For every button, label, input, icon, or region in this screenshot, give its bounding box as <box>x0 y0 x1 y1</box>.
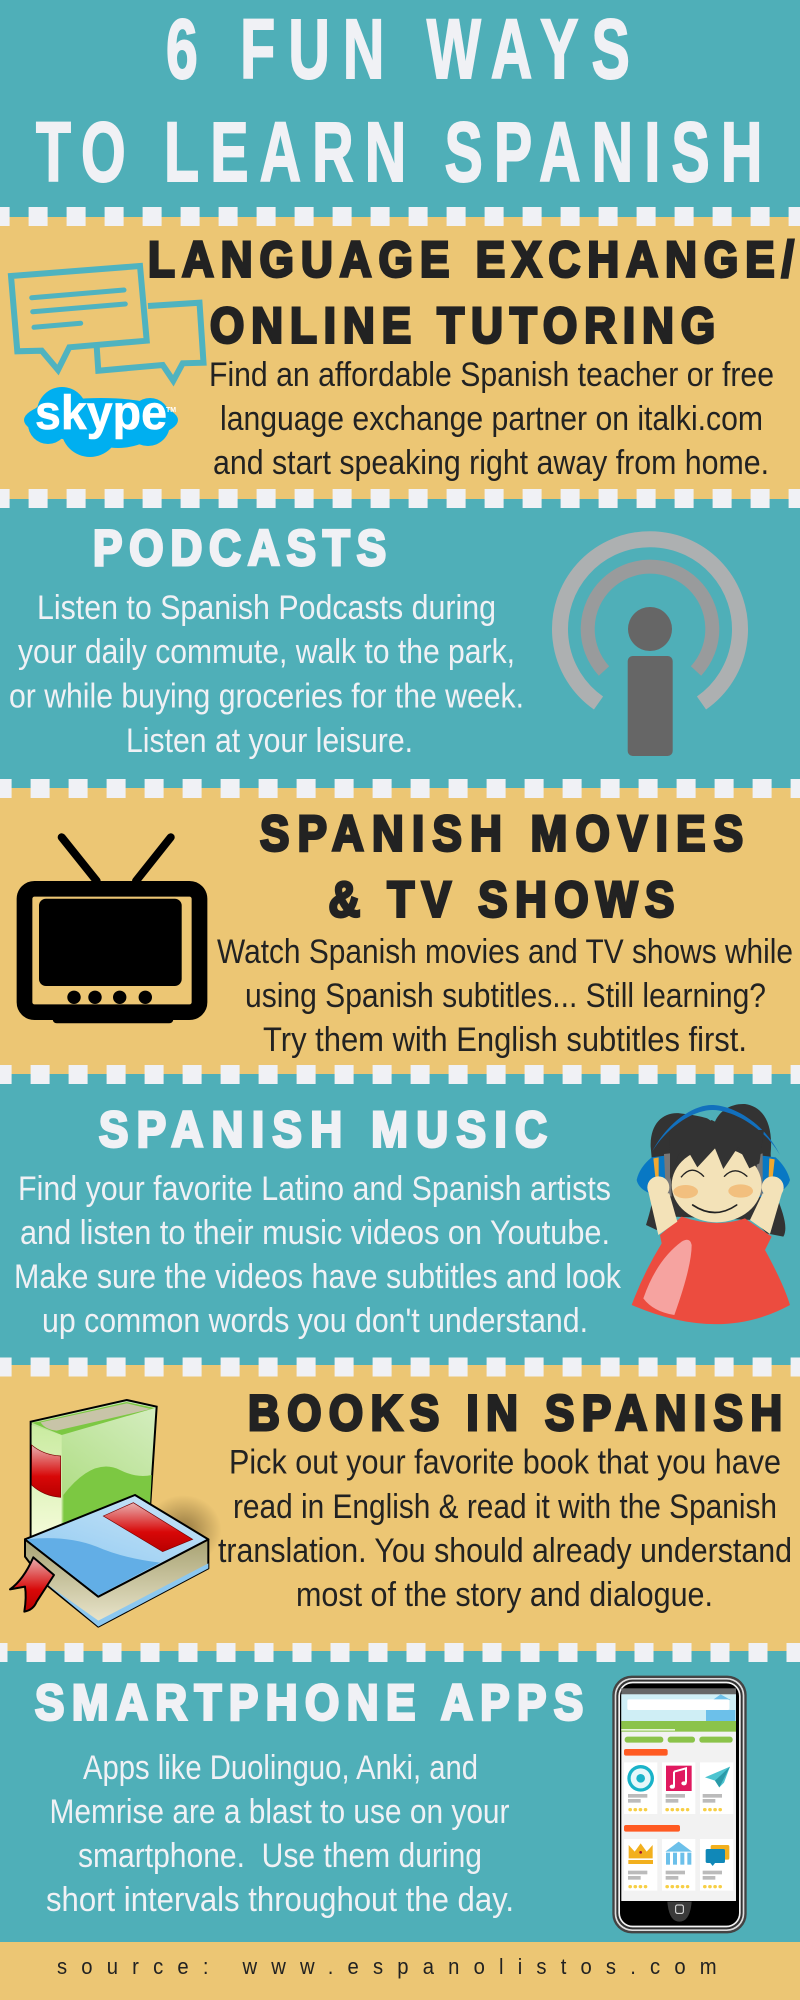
icon: podcast antenna <box>560 539 740 756</box>
panel: spanish movies and tv shows <box>0 788 800 1074</box>
icon: skype logo: skype <box>35 387 167 440</box>
heading: books in spanish: BOOKS IN SPANISH <box>248 1384 782 1441</box>
text block: music description: and listen to their music videos on Youtube. <box>20 1214 610 1252</box>
icon: girl with headphones <box>632 1104 790 1324</box>
text block: books description: most of the story and dialogue. <box>296 1576 713 1614</box>
text block: music description: Make sure the videos have subtitles and look <box>14 1258 622 1296</box>
text block: language exchange description <box>209 356 774 482</box>
text block: apps description <box>46 1749 514 1919</box>
heading: spanish movies <box>260 805 743 927</box>
icon: skype logo <box>24 387 178 457</box>
panel: smartphone apps <box>35 1674 747 1933</box>
title <box>36 3 762 200</box>
footer band: source <box>0 1942 800 2000</box>
text block: music description: Find your favorite Latino and Spanish artists <box>18 1170 611 1208</box>
footer band: source: source: www.espanolistos.com <box>57 1955 717 1979</box>
text block: apps description: Memrise are a blast to use on your <box>50 1793 510 1831</box>
panel: spanish music <box>14 1101 790 1340</box>
title: TO LEARN SPANISH <box>36 106 762 200</box>
heading: language exchange: ONLINE TUTORING <box>210 297 715 353</box>
text block: movies description: Try them with English subtitles first. <box>263 1021 747 1059</box>
text block: podcasts description: Listen at your leisure. <box>126 722 413 760</box>
heading: spanish movies: SPANISH MOVIES <box>260 805 743 861</box>
text block: podcasts description: Listen to Spanish Podcasts during <box>37 589 496 627</box>
text block: apps description: smartphone. Use them during <box>78 1837 482 1875</box>
text block: apps description: short intervals throughout the day. <box>46 1881 514 1919</box>
heading: podcasts: PODCASTS <box>93 519 386 576</box>
icon: smartphone <box>612 1676 747 1933</box>
text block: podcasts description: your daily commute, walk to the park, <box>18 633 515 671</box>
icon: skype logo: TM <box>166 407 176 414</box>
icon: chat bubbles <box>11 266 204 381</box>
heading: spanish music: SPANISH MUSIC <box>99 1101 547 1157</box>
text block: podcasts description: or while buying groceries for the week. <box>9 678 524 716</box>
text block: apps description: Apps like Duolinguo, Anki, and <box>83 1749 478 1787</box>
heading: smartphone apps: SMARTPHONE APPS <box>35 1674 583 1730</box>
title: 6 FUN WAYS <box>166 3 630 97</box>
panel: books in spanish <box>0 1365 800 1651</box>
icon: television <box>24 837 200 1023</box>
heading: language exchange: LANGUAGE EXCHANGE/ <box>148 231 794 287</box>
icon: books <box>10 1400 222 1627</box>
panel: podcasts <box>9 519 740 760</box>
text block: music description <box>14 1170 622 1340</box>
text block: books description <box>218 1444 792 1614</box>
text block: podcasts description <box>9 589 524 760</box>
panel: language exchange / online tutoring <box>0 217 800 499</box>
heading: language exchange <box>148 231 794 353</box>
text block: movies description <box>217 933 793 1059</box>
heading: spanish movies: & TV SHOWS <box>328 871 674 927</box>
text block: music description: up common words you don't understand. <box>42 1302 588 1340</box>
